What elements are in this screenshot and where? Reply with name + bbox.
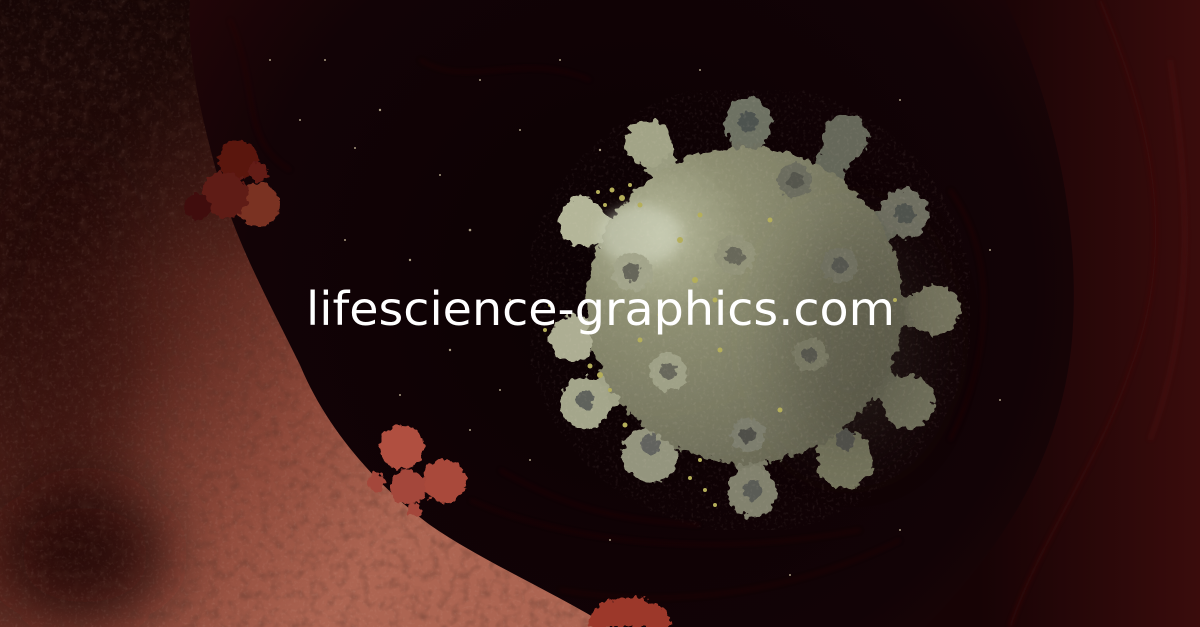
right vessel wall <box>925 0 1200 627</box>
virus spikes <box>550 98 960 517</box>
floating particles <box>269 59 1001 576</box>
site name: lifescience-graphics.com <box>306 282 895 336</box>
vessel wall folds <box>230 20 984 598</box>
antibody: lower <box>367 425 466 517</box>
yellow granules <box>543 183 897 507</box>
virus highlight <box>598 205 682 265</box>
virus body <box>587 147 903 463</box>
left tissue surface <box>0 0 610 627</box>
antibody: upper <box>184 140 280 227</box>
virus surface knobs <box>576 112 915 500</box>
virus shadow <box>780 230 920 450</box>
virus grain <box>530 90 970 530</box>
virus particle <box>550 98 960 517</box>
antibody: bottom <box>588 597 672 627</box>
